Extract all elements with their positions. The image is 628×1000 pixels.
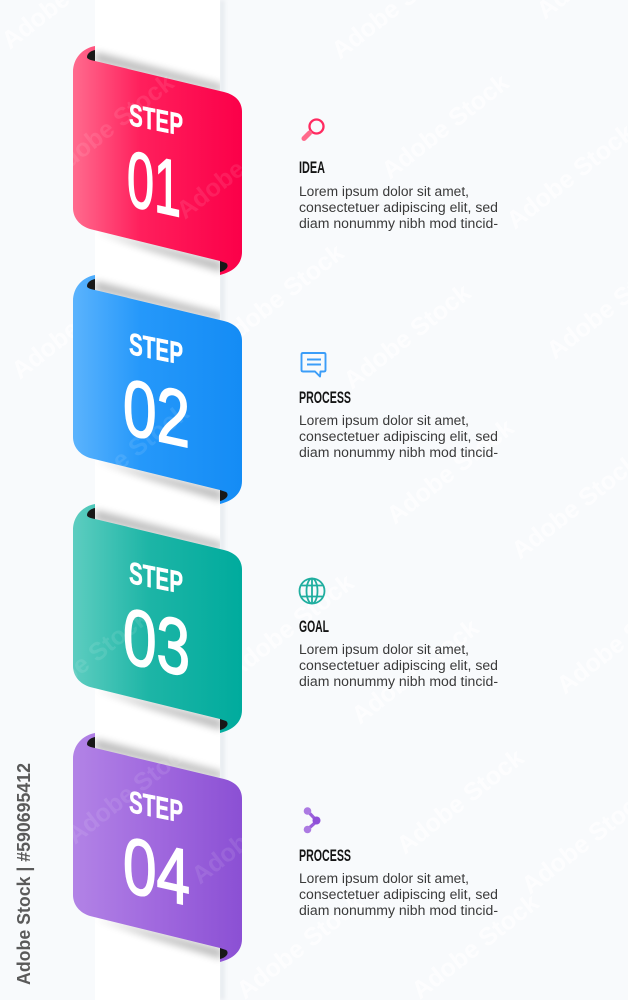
heading: process 2: PROCESS	[299, 847, 351, 865]
faint watermark overlay: Adobe Stock	[56, 399, 194, 515]
faint watermark overlay: Adobe Stock	[186, 774, 324, 890]
body: idea: Lorem ipsum dolor sit amet,	[299, 184, 469, 199]
number: 03: 03	[123, 591, 190, 694]
text block: idea	[299, 159, 498, 231]
fold top	[87, 279, 95, 290]
body: idea: diam nonummy nibh mod tincid-	[299, 216, 498, 231]
text block: process	[299, 389, 498, 460]
body: idea: consectetuer adipiscing elit, sed	[299, 200, 498, 215]
heading: idea: IDEA	[299, 159, 325, 177]
body: goal: diam nonummy nibh mod tincid-	[299, 674, 498, 689]
body: goal: consectetuer adipiscing elit, sed	[299, 658, 498, 673]
fold bottom	[220, 490, 228, 501]
panel: step 3 ribbon	[73, 504, 242, 733]
vertical white strip	[95, 0, 224, 1000]
label: STEP: STEP	[129, 555, 183, 601]
panel: step 4 ribbon	[73, 733, 242, 962]
heading: goal: GOAL	[299, 618, 329, 636]
label: STEP: STEP	[129, 326, 183, 372]
text block: process 2	[299, 847, 498, 918]
body: process 2: diam nonummy nibh mod tincid-	[299, 903, 498, 918]
watermark pattern: Adobe Stock	[391, 744, 529, 860]
body: process: Lorem ipsum dolor sit amet,	[299, 413, 469, 428]
stock credit: Adobe Stock | #590695412	[14, 763, 34, 985]
text block: goal	[299, 618, 498, 689]
panel: step 1 ribbon	[73, 46, 242, 275]
fold bottom	[220, 719, 228, 730]
icon: share nodes	[304, 807, 320, 833]
icon: globe	[300, 578, 324, 604]
label: STEP: STEP	[129, 97, 183, 143]
fold bottom	[220, 261, 228, 272]
watermark pattern: Adobe Stock	[211, 239, 349, 355]
heading: process: PROCESS	[299, 389, 351, 407]
watermark pattern: Adobe Stock	[6, 269, 144, 385]
watermark pattern: Adobe Stock	[221, 569, 359, 685]
ribbon body	[73, 275, 242, 504]
number: 01: 01	[127, 134, 181, 234]
watermark pattern: Adobe Stock	[346, 614, 484, 730]
faint watermark overlay: Adobe Stock	[16, 604, 154, 720]
watermark pattern: Adobe Stock	[338, 279, 476, 395]
body: process: diam nonummy nibh mod tincid-	[299, 445, 498, 460]
ribbon body	[73, 46, 242, 275]
ribbon body	[73, 733, 242, 962]
faint watermark overlay: Adobe Stock	[41, 69, 179, 185]
watermark pattern: Adobe Stock	[376, 69, 514, 185]
fold top	[87, 508, 95, 519]
body: process 2: consectetuer adipiscing elit, sed	[299, 887, 498, 902]
body: process: consectetuer adipiscing elit, sed	[299, 429, 498, 444]
number: 04: 04	[123, 820, 190, 923]
faint watermark overlay: Adobe Stock	[171, 109, 309, 225]
icon: speech bubble	[302, 353, 326, 376]
icon: magnifier	[304, 120, 324, 138]
ribbon body	[73, 504, 242, 733]
fold top	[87, 50, 95, 61]
fold bottom	[220, 948, 228, 959]
faint watermark overlay: Adobe Stock	[61, 734, 199, 850]
faint watermark overlay	[16, 69, 324, 890]
body: goal: Lorem ipsum dolor sit amet,	[299, 642, 469, 657]
label: STEP: STEP	[129, 784, 183, 830]
number: 02: 02	[123, 362, 190, 465]
fold top	[87, 737, 95, 748]
watermark pattern: Adobe Stock	[381, 414, 519, 530]
body: process 2: Lorem ipsum dolor sit amet,	[299, 871, 469, 886]
panel: step 2 ribbon	[73, 275, 242, 504]
